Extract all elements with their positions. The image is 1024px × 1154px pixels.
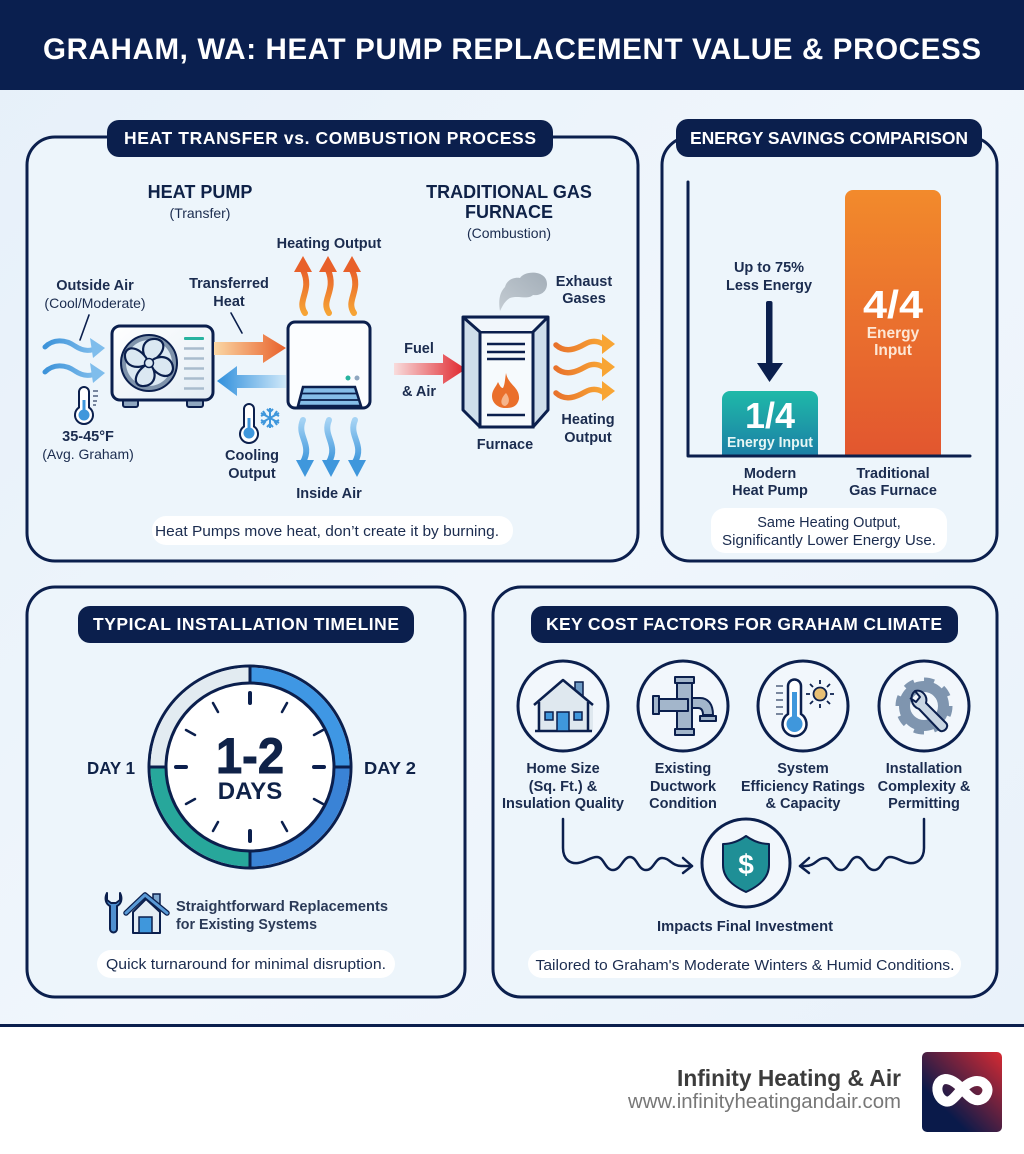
icon: gear and wrench bbox=[879, 661, 969, 751]
icon: exhaust smoke bbox=[499, 273, 547, 311]
label: exhaust gases bbox=[556, 274, 612, 307]
bar label: heat pump bbox=[732, 466, 808, 499]
callout: tailored: Tailored to Graham's Moderate Winters & Humid Conditions. bbox=[536, 957, 954, 974]
label: installation: Complexity & bbox=[878, 779, 971, 795]
icon: thermometer and sun bbox=[758, 661, 848, 751]
callout: heat pumps move heat bbox=[152, 516, 513, 545]
logo bbox=[922, 1052, 1002, 1132]
panel heading pill: ENERGY SAVINGS COMPARISON bbox=[690, 128, 968, 148]
arrow: energy reduction bbox=[757, 301, 783, 382]
label: efficiency: Efficiency Ratings bbox=[741, 779, 865, 795]
factor: installation bbox=[878, 661, 971, 812]
furnace heading: FURNACE bbox=[465, 202, 553, 222]
panel heading pill: KEY COST FACTORS FOR GRAHAM CLIMATE bbox=[546, 614, 942, 634]
arrow: right squiggle bbox=[800, 819, 924, 873]
website: www.infinityheatingandair.com bbox=[627, 1091, 901, 1113]
clock value: 1-2 bbox=[216, 728, 284, 784]
label: outside air bbox=[44, 278, 146, 340]
furnace heading bbox=[426, 182, 592, 241]
furnace heading: TRADITIONAL GAS bbox=[426, 182, 592, 202]
label: outside air: (Cool/Moderate) bbox=[44, 295, 146, 311]
callout: heat pumps move heat: Heat Pumps move heat, don’t create it by burning. bbox=[155, 523, 499, 540]
label: exhaust gases: Exhaust bbox=[556, 274, 612, 290]
bar label: gas furnace: Traditional bbox=[856, 466, 930, 482]
clock chart bbox=[149, 666, 351, 868]
factor: ductwork bbox=[638, 661, 728, 812]
label: home size: (Sq. Ft.) & bbox=[529, 779, 598, 795]
bar: gas furnace: 4/4 bbox=[863, 284, 923, 327]
label: transferred heat bbox=[189, 276, 269, 333]
label: efficiency: & Capacity bbox=[766, 796, 840, 812]
panel heading pill bbox=[676, 119, 982, 157]
label: installation: Permitting bbox=[888, 796, 960, 812]
label: inside air: Inside Air bbox=[296, 486, 362, 502]
icon: inside air waves bbox=[296, 420, 366, 477]
bar: gas furnace: Energy bbox=[867, 325, 920, 342]
clock value bbox=[216, 728, 284, 805]
icon: furnace bbox=[463, 317, 548, 427]
callout: same heating output: Same Heating Output, bbox=[757, 515, 901, 531]
panel: key cost factors bbox=[493, 587, 997, 997]
panel heading pill bbox=[107, 120, 553, 157]
label: up to 75 percent bbox=[726, 260, 812, 294]
header banner bbox=[0, 0, 1024, 90]
text: straightforward replacements: Straightforward Replacements bbox=[176, 899, 388, 915]
bar: heat pump bbox=[722, 391, 818, 456]
icon: heating output waves bbox=[294, 256, 361, 313]
label: transferred heat: Transferred bbox=[189, 276, 269, 292]
segment: day 1 end bbox=[150, 767, 250, 866]
panel: heat transfer vs combustion bbox=[27, 120, 638, 561]
icon: outdoor unit bbox=[112, 326, 213, 407]
arrow: left squiggle bbox=[563, 819, 692, 873]
label: cooling output bbox=[225, 448, 279, 482]
bar: heat pump: 1/4 bbox=[745, 395, 795, 436]
segment: day 2 end bbox=[250, 767, 350, 866]
panel heading pill: HEAT TRANSFER vs. COMBUSTION PROCESS bbox=[124, 128, 536, 148]
arrow: fuel and air: & Air bbox=[402, 384, 436, 400]
bar label: heat pump: Modern bbox=[744, 466, 796, 482]
heat pump heading: HEAT PUMP bbox=[148, 182, 252, 202]
bar: gas furnace bbox=[845, 190, 941, 456]
chart axes bbox=[688, 182, 970, 456]
label: furnace heating output: Heating bbox=[561, 412, 615, 428]
arrow: fuel and air: Fuel bbox=[404, 341, 434, 357]
segment: day 1 start bbox=[150, 668, 250, 767]
label: temperature: 35-45°F bbox=[62, 429, 114, 445]
panel heading pill bbox=[78, 606, 414, 643]
callout: same heating output: Significantly Lower Energy Use. bbox=[722, 533, 936, 549]
bar chart bbox=[688, 182, 970, 499]
segment: day 2 start bbox=[250, 668, 350, 767]
label: temperature: (Avg. Graham) bbox=[42, 446, 134, 462]
icon: house bbox=[126, 894, 167, 933]
arrow: return cooling bbox=[217, 366, 286, 396]
label: home size: Insulation Quality bbox=[502, 796, 624, 812]
icon: thermometer outdoor bbox=[75, 387, 98, 424]
footer bbox=[0, 1024, 1024, 1154]
arrow: fuel and air bbox=[394, 341, 466, 400]
factor: efficiency bbox=[741, 661, 865, 812]
bar: gas furnace: Input bbox=[874, 342, 912, 359]
title: GRAHAM, WA: HEAT PUMP REPLACEMENT VALUE & PROCESS bbox=[43, 33, 981, 66]
icon: dollar shield bbox=[702, 819, 790, 907]
clock value: DAYS bbox=[218, 778, 282, 805]
label: cooling output: Output bbox=[228, 466, 276, 482]
label: home size: Home Size bbox=[526, 761, 600, 777]
brand name: Infinity Heating & Air bbox=[677, 1065, 901, 1091]
label: home size bbox=[502, 761, 624, 812]
bar: heat pump: Energy Input bbox=[727, 434, 813, 451]
panel heading pill: TYPICAL INSTALLATION TIMELINE bbox=[93, 614, 399, 634]
label: heating output top: Heating Output bbox=[277, 236, 382, 252]
label: ductwork: Ductwork bbox=[650, 779, 717, 795]
label: installation bbox=[878, 761, 971, 812]
label: up to 75 percent: Less Energy bbox=[726, 278, 812, 294]
icon: indoor unit bbox=[288, 322, 370, 408]
heat pump heading bbox=[148, 182, 252, 221]
factor: home size bbox=[502, 661, 624, 812]
label: exhaust gases: Gases bbox=[562, 291, 606, 307]
arrow: transferred heat bbox=[214, 334, 286, 363]
icon: furnace heating waves bbox=[556, 334, 615, 401]
label: impacts final investment: Impacts Final Investment bbox=[657, 919, 833, 935]
text: straightforward replacements bbox=[176, 899, 388, 933]
panel heading pill bbox=[531, 606, 958, 643]
label: furnace heating output: Output bbox=[564, 430, 612, 446]
furnace heading: (Combustion) bbox=[467, 225, 551, 241]
icon: ducts bbox=[638, 661, 728, 751]
label: outside air: Outside Air bbox=[56, 278, 134, 294]
icon: home bbox=[518, 661, 608, 751]
callout: tailored bbox=[528, 950, 961, 978]
label: day 1: DAY 1 bbox=[87, 758, 135, 778]
bar label: gas furnace: Gas Furnace bbox=[849, 483, 937, 499]
callout: same heating output bbox=[711, 508, 947, 553]
label: ductwork bbox=[649, 761, 717, 812]
label: transferred heat: Heat bbox=[213, 294, 245, 310]
text: straightforward replacements: for Existing Systems bbox=[176, 917, 317, 933]
label: efficiency bbox=[741, 761, 865, 812]
label: installation: Installation bbox=[886, 761, 962, 777]
icon: dollar shield: $ bbox=[738, 849, 754, 880]
bar label: gas furnace bbox=[849, 466, 937, 499]
label: ductwork: Existing bbox=[655, 761, 711, 777]
callout: quick turnaround bbox=[97, 950, 395, 978]
icon: outside air waves bbox=[45, 338, 105, 383]
label: furnace heating output bbox=[561, 412, 615, 446]
panel: installation timeline bbox=[27, 587, 465, 997]
label: efficiency: System bbox=[777, 761, 829, 777]
label: furnace: Furnace bbox=[477, 437, 533, 453]
label: cooling output: Cooling bbox=[225, 448, 279, 464]
label: day 2: DAY 2 bbox=[364, 758, 416, 778]
label: temperature bbox=[42, 429, 134, 462]
bar label: heat pump: Heat Pump bbox=[732, 483, 808, 499]
label: ductwork: Condition bbox=[649, 796, 717, 812]
heat pump heading: (Transfer) bbox=[170, 205, 230, 221]
label: up to 75 percent: Up to 75% bbox=[734, 260, 804, 276]
callout: quick turnaround: Quick turnaround for minimal disruption. bbox=[106, 956, 386, 973]
panel: energy savings comparison bbox=[662, 119, 997, 561]
icon: thermometer with snowflake bbox=[240, 404, 279, 443]
icon: wrench bbox=[106, 893, 121, 933]
